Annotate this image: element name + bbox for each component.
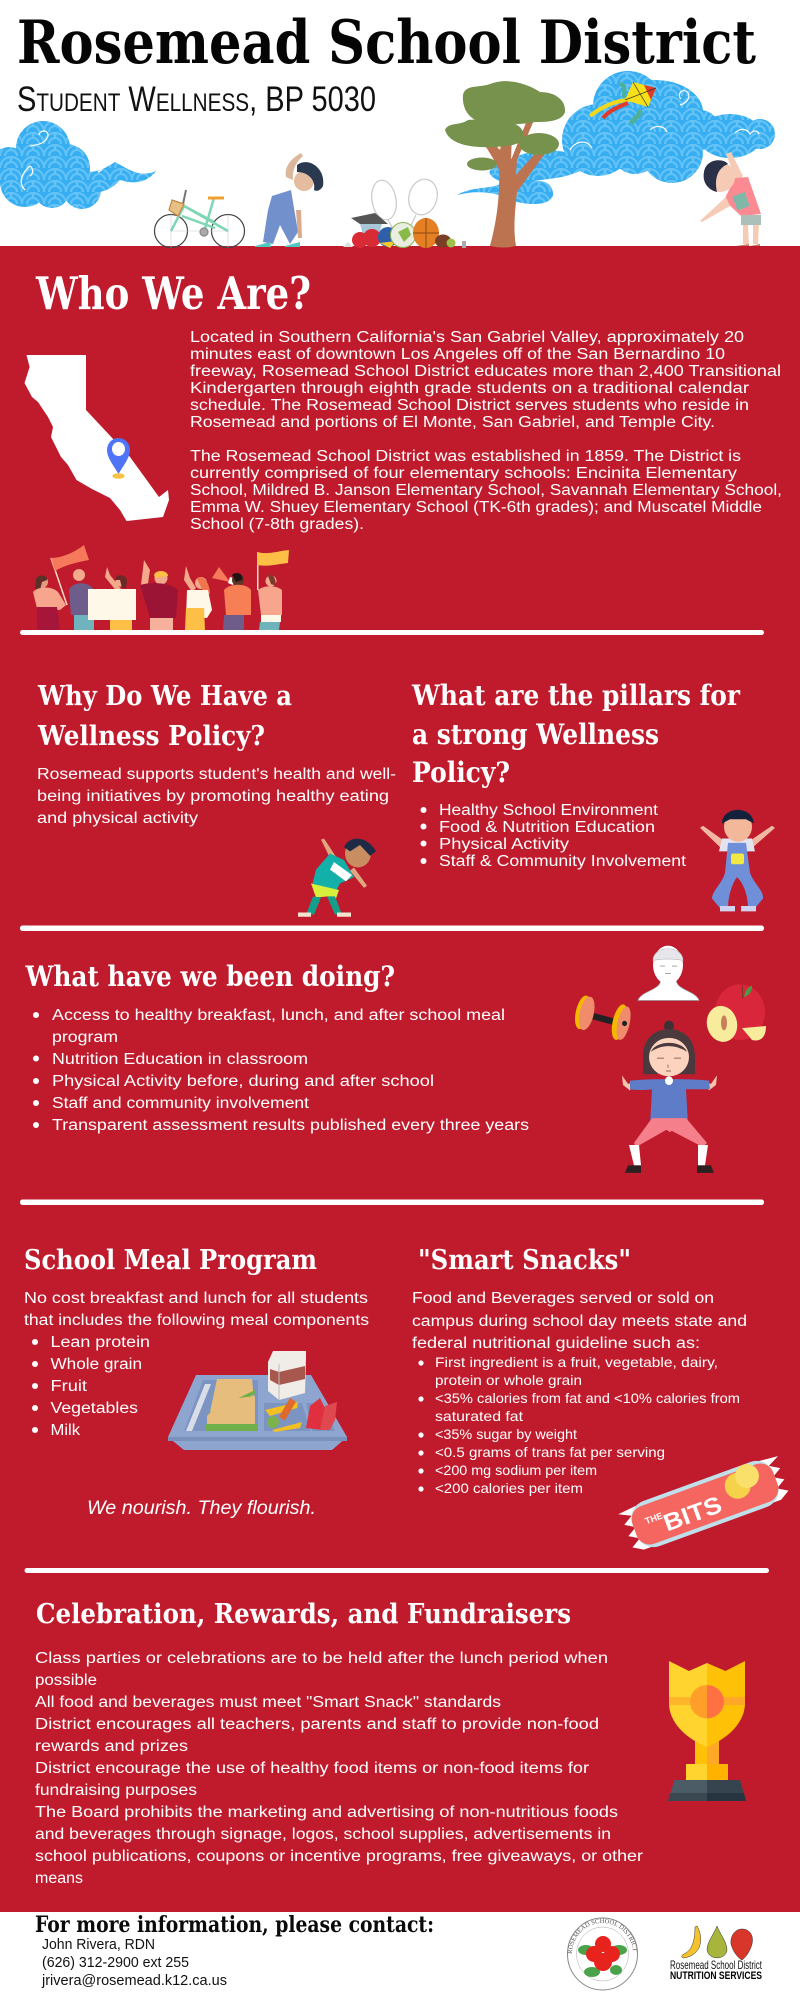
text block: smart snacks intro: Food and Beverages served or sold on [412, 1290, 714, 1307]
text block: who we are: currently comprised of four elementary schools: Encinita Elementary [190, 465, 737, 482]
bullet list: smart snacks guidelines: protein or whole grain [435, 1372, 582, 1388]
heading: pillars [411, 679, 741, 789]
heading: why wellness policy [37, 681, 292, 752]
bullet list: meal components: Whole grain [50, 1356, 142, 1373]
bullet list: what we have been doing: Nutrition Education in classroom [52, 1051, 308, 1068]
text block: contact details [41, 1937, 227, 1989]
bullet list: smart snacks guidelines [418, 1354, 740, 1496]
text block: who we are [190, 329, 782, 533]
header illustration: left cloud [0, 121, 156, 209]
text block: who we are: schedule. The Rosemead School District serves students who reside in [190, 397, 749, 414]
illustration: lunch tray [168, 1351, 347, 1450]
text block: celebration rules: District encourage the use of healthy food items or non-food items for [35, 1760, 589, 1777]
bullet list: smart snacks guidelines: saturated fat [435, 1408, 523, 1424]
text block: contact details: jrivera@rosemead.k12.ca.us [41, 1973, 227, 1989]
header illustration: kite [590, 82, 656, 124]
bullet list: smart snacks guidelines: <200 calories per item [435, 1480, 583, 1496]
text block: why wellness policy [37, 766, 396, 827]
text block: celebration rules: The Board prohibits the marketing and advertising of non-nutritious foods [35, 1804, 618, 1821]
heading: contact: For more information, please contact: [35, 1912, 434, 1938]
text block: smart snacks intro [412, 1290, 747, 1352]
header illustration: tree [445, 81, 565, 248]
bullet list: pillars: Staff & Community Involvement [439, 853, 687, 870]
text block: contact details: (626) 312-2900 ext 255 [42, 1955, 189, 1971]
text block: celebration rules: All food and beverages must meet "Smart Snack" standards [35, 1694, 501, 1711]
illustration: snack bar: BITS [660, 1491, 726, 1537]
text block: smart snacks intro: federal nutritional guideline such as: [412, 1335, 700, 1352]
heading: school meal program: School Meal Program [24, 1245, 317, 1276]
bullet list: what we have been doing [33, 1007, 529, 1134]
text block: who we are: Emma W. Shuey Elementary School (TK-6th grades); and Muscatel Middle [190, 499, 762, 516]
text block: celebration rules [35, 1650, 643, 1887]
text block: why wellness policy: being initiatives by promoting healthy eating [37, 788, 389, 805]
text block: who we are: Kindergarten through eighth grade students on a traditional calendar [190, 380, 749, 397]
bullet list: pillars: Healthy School Environment [439, 802, 659, 819]
header illustration: sports equipment [343, 176, 466, 248]
heading: who we are: Who We Are? [35, 267, 311, 320]
divider 2 [20, 926, 764, 931]
bullet list: what we have been doing: Transparent assessment results published every three years [52, 1117, 529, 1134]
text block: celebration rules: District encourages all teachers, parents and staff to provide non-food [35, 1716, 599, 1733]
bullet list: what we have been doing: Access to healthy breakfast, lunch, and after school meal [52, 1007, 505, 1024]
bullet list: smart snacks guidelines: <0.5 grams of trans fat per serving [435, 1444, 665, 1460]
bullet list: pillars: Food & Nutrition Education [439, 819, 655, 836]
bullet list: smart snacks guidelines: <35% calories from fat and <10% calories from [435, 1390, 740, 1406]
illustration: side-bend kid [298, 839, 376, 917]
logo: district seal [567, 1918, 638, 1990]
heading: pillars: What are the pillars for [411, 679, 741, 712]
text block: contact details: John Rivera, RDN [42, 1937, 155, 1953]
illustration: head with brain [638, 946, 699, 1000]
bullet list: what we have been doing: Physical Activity before, during and after school [52, 1073, 434, 1090]
bullet list: pillars [420, 802, 687, 870]
icon: trophy [668, 1661, 746, 1801]
subtitle: Student Wellness, BP 5030 [17, 80, 376, 119]
text block: who we are: School, Mildred B. Janson Elementary School, Savannah Elementary School, [190, 482, 782, 499]
bullet list: pillars: Physical Activity [439, 836, 569, 853]
bullet list: meal components [32, 1334, 150, 1439]
heading: smart snacks: "Smart Snacks" [418, 1245, 631, 1276]
text block: celebration rules: fundraising purposes [35, 1782, 197, 1799]
logo: district seal: ROSEMEAD SCHOOL DISTRICT [568, 1918, 638, 1954]
text block: who we are: Rosemead and portions of El Monte, San Gabriel, and Temple City. [190, 414, 715, 431]
bullet list: what we have been doing: program [52, 1029, 118, 1046]
header illustration: stretching girl [700, 152, 761, 246]
text block: smart snacks intro: campus during school day meets state and [412, 1313, 747, 1330]
heading: celebration rewards fundraisers: Celebration, Rewards, and Fundraisers [36, 1599, 571, 1630]
text block: celebration rules: rewards and prizes [35, 1738, 188, 1755]
text block: celebration rules: means [35, 1870, 83, 1887]
text block: who we are: minutes east of downtown Los Angeles off of the San Bernardino 10 [190, 346, 725, 363]
heading: why wellness policy: Why Do We Have a [37, 681, 292, 712]
bullet list: meal components: Fruit [50, 1378, 88, 1395]
divider 4 [24, 1568, 769, 1573]
bullet list: meal components: Lean protein [50, 1334, 150, 1351]
heading: why wellness policy: Wellness Policy? [37, 721, 265, 752]
header illustration: bicycle [154, 190, 244, 248]
illustration: squatting girl [622, 1021, 717, 1173]
bullet list: meal components: Milk [50, 1422, 80, 1439]
bullet list: smart snacks guidelines: First ingredient is a fruit, vegetable, dairy, [435, 1354, 718, 1370]
illustration: overalls kid [700, 810, 775, 911]
text block: celebration rules: and beverages through signage, logos, school supplies, advertisements in [35, 1826, 611, 1843]
text block: celebration rules: possible [35, 1672, 97, 1689]
header illustration: stretching boy [255, 153, 323, 247]
illustration: snack bar: THE [644, 1511, 664, 1526]
bullet list: smart snacks guidelines: <35% sugar by weight [435, 1426, 577, 1442]
california map with pin [24, 355, 169, 521]
bullet list: meal components: Vegetables [50, 1400, 138, 1417]
tagline: We nourish. They flourish. [87, 1498, 316, 1519]
text block: who we are: School (7-8th grades). [190, 516, 364, 533]
text block: school meal intro [24, 1290, 369, 1329]
text block: why wellness policy: Rosemead supports student's health and well- [37, 766, 396, 783]
heading: pillars: a strong Wellness [412, 718, 659, 751]
text block: who we are: The Rosemead School District was established in 1859. The District is [190, 448, 741, 465]
text block: celebration rules: Class parties or celebrations are to be held after the lunch period when [35, 1650, 608, 1667]
heading: pillars: Policy? [412, 756, 510, 789]
logo: nutrition services: NUTRITION SERVICES [670, 1970, 762, 1982]
bullet list: what we have been doing: Staff and community involvement [52, 1095, 310, 1112]
divider 1 [20, 630, 764, 635]
text block: school meal intro: No cost breakfast and lunch for all students [24, 1290, 368, 1307]
illustration: apple [702, 984, 766, 1047]
illustration: dumbbell [572, 993, 634, 1042]
text block: who we are: Located in Southern California's San Gabriel Valley, approximately 20 [190, 329, 744, 346]
logo: nutrition services [670, 1926, 762, 1982]
text block: celebration rules: school publications, coupons or incentive programs, free giveaways, or other [35, 1848, 643, 1865]
text block: school meal intro: that includes the following meal components [24, 1312, 369, 1329]
text block: who we are: freeway, Rosemead School District educates more than 2,400 Transitional [190, 363, 781, 380]
illustration: crowd with flags [33, 545, 289, 630]
text block: why wellness policy: and physical activity [37, 810, 198, 827]
header illustration: right cloud [457, 71, 775, 204]
bullet list: smart snacks guidelines: <200 mg sodium per item [435, 1462, 597, 1478]
divider 3 [20, 1200, 764, 1205]
illustration: snack bar [617, 1452, 793, 1556]
heading: what have we been doing: What have we been doing? [25, 960, 395, 993]
